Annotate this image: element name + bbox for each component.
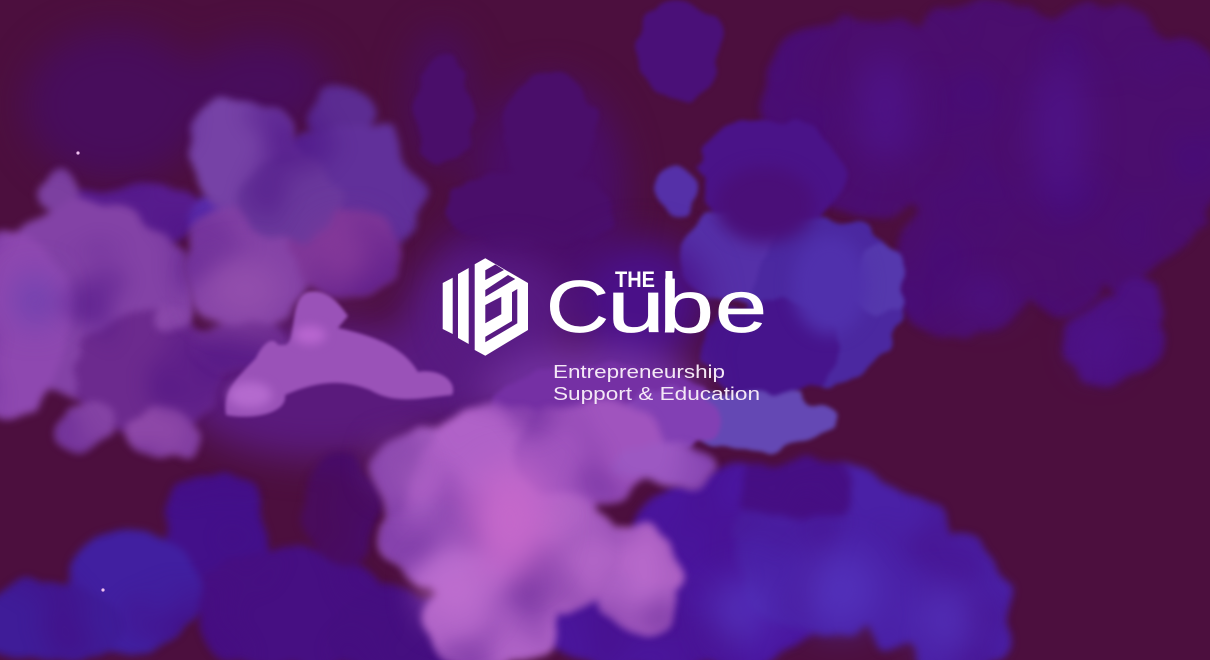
smoke: right central blue plume [655, 117, 908, 400]
tagline: Entrepreneurship [553, 361, 725, 382]
logo: wordmark: C [546, 267, 609, 348]
logo: wordmark: THE [615, 267, 655, 292]
logo: hexagon cube mark [443, 258, 528, 356]
smoke: top centre indigo lobes [412, 0, 722, 250]
smoke: upper right indigo mass [760, 0, 1210, 387]
logo: wordmark: b [659, 267, 714, 348]
tagline [553, 361, 760, 404]
smoke: pink tendril [225, 291, 453, 417]
smoke: small bright specks [76, 151, 105, 592]
logo: wordmark: e [715, 267, 767, 348]
logo: wordmark [546, 267, 767, 348]
tagline: Support & Education [553, 383, 760, 404]
smoke: left mauve cloud [0, 175, 250, 459]
smoke: lower left indigo mass [0, 455, 470, 660]
logo: wordmark: u [607, 267, 665, 348]
smoke: upper centre-left mauve plume [160, 85, 422, 367]
smoke: lower right blue billows [530, 460, 1010, 660]
smoke: faint dark upper haze [25, 30, 625, 460]
smoke: centre dark violet behind logo [450, 240, 705, 435]
smoke: central lilac-blue sweep [490, 365, 835, 452]
smoke: bottom centre pink cloud [370, 400, 710, 660]
